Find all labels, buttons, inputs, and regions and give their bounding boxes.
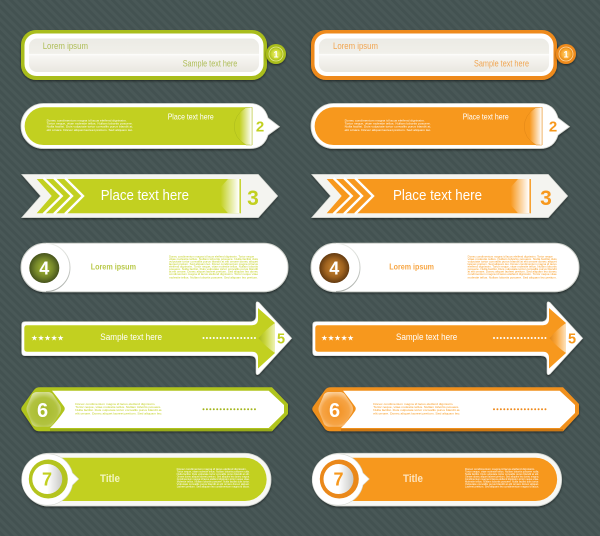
text block: fine print: Donec condimentum magna id lacus eleifend dignissim. [177,467,247,471]
text: sample text orange: Sample text here [474,59,529,69]
panel: orange banner 2 [311,104,570,148]
panel: orange banner 1 [311,30,576,80]
text block: fine print: posuere. Nulla facilisi. Duis vulputate tortor convallis purus blandit [169,267,258,271]
text: place text here: Place text here [101,187,189,204]
dotted line orange [494,408,546,410]
text block: fine print: laoreet pretium. Sed aliquam leo. Donec condimentum magna id lacus [169,262,259,266]
text: sample text here orange: Sample text here [396,332,457,343]
text block: fine print: Tortor neque, vitae molestie tellus. Nullam lobortis posuere nulla. [177,470,250,474]
text block: fine print [177,467,250,488]
text block: fine print orange [373,402,461,416]
text block: fine print [47,118,134,132]
text: place text here orange: Place text here [463,112,509,122]
panel: orange banner 7 [312,453,562,506]
text block: fine print orange: Tortor neque, vitae molestie tellus. Nullam lobortis posuere. [373,405,460,409]
panel: orange arrow 5 [313,302,583,375]
panel: orange banner 4 [311,243,579,292]
text block: fine print orange: Ornare donec aliquet laoreet pretium. Sed aliquam leo donec magna. [465,474,539,478]
text block: fine print: Ornare donec aliquet laoreet pretium. Sed aliquam leo donec magna. [177,474,250,478]
icon: number 4 disc [29,253,59,283]
panel: green banner 7 [22,453,271,506]
icon: number 7 medallion orange [312,454,369,505]
text block: fine print orange [468,254,558,280]
text block: fine print orange: Condimentum magna id lacus eleifend dignissim tortor neque vitae. [465,477,539,481]
panel: green banner 3 [22,174,278,218]
text block: fine print: Condimentum magna id lacus eleifend dignissim tortor neque vitae. [177,477,250,481]
text: title: Title [100,473,120,485]
panel: green banner 4 [21,243,288,292]
chevron stripes orange [334,178,373,214]
chevron stripes [44,178,83,214]
text: lorem ipsum: Lorem ipsum [91,262,136,272]
text block: fine print [169,254,259,280]
text block: fine print: Donec condimentum magna id lacus eleifend dignissim. [75,402,156,406]
text block: fine print orange: Laoreet pretium. Sed aliquam leo condimentum magna id lacus. [465,484,539,488]
panel: orange banner 3 [312,174,568,218]
text block: fine print: eleifend dignissim. Tortor neque, vitae molestie tellus. Nullam lobortis [169,264,259,268]
number 5 orange: 5 [568,332,576,348]
text: lorem ipsum: Lorem ipsum [43,41,88,51]
text block: fine print orange: Donec condimentum magna id lacus eleifend dignissim. Tortor neque [468,254,553,258]
text block: fine print: Donec condimentum magna id lacus eleifend dignissim. Tortor neque [169,254,255,258]
number 3: 3 [247,187,259,210]
text block: fine print: Nulla facilisi. Duis vulputate tortor convallis purus blandit at. [47,124,134,128]
text block: fine print orange: elit ornare. Donec aliquet laoreet pretium. Sed aliquam leo. [345,128,432,132]
text block: fine print orange: posuere. Nulla facilisi. Duis vulputate tortor convallis purus blandit [468,267,557,271]
text block: fine print: Tortor neque, vitae molestie tellus. Nullam lobortis posuere. [47,122,133,126]
text block: fine print orange: vitae molestie tellus. Nullam lobortis posuere. Nulla facilisi duis [468,257,558,261]
dotted line orange [494,337,546,339]
text block: fine print orange: laoreet pretium. Sed aliquam leo. Donec condimentum magna id lacus [468,262,557,266]
text block: fine print: vitae molestie tellus. Nullam lobortis posuere. Nulla facilisi duis [169,257,259,261]
icon: number 7 medallion orange: 7 [333,470,344,490]
text block: fine print: vulputate tortor convallis purus blandit at elit ornare donec aliquet [169,260,258,264]
icon: number 6 badge: 6 [37,400,48,422]
icon: number 7 medallion: 7 [42,470,52,490]
icon: number 6 badge [26,392,61,427]
number 2: 2 [256,118,264,136]
text block: fine print orange: Donec condimentum magna id lacus eleifend dignissim. [345,118,425,122]
icon: number 6 badge orange [318,392,353,427]
icon: number 4 disc orange: 4 [329,258,339,278]
text block: fine print orange: elit ornare. Donec aliquet laoreet pretium. Sed aliquam leo. [373,412,461,416]
text: sample text: Sample text here [183,59,237,69]
text block: fine print orange: Nulla facilisi. Duis vulputate tortor convallis purus blandit at elit. [465,472,539,476]
text: place text here: Place text here [168,112,214,122]
text block: fine print: elit ornare. Donec aliquet laoreet pretium. Sed aliquam leo. [75,412,163,416]
icon: number 7 medallion [22,454,79,505]
text block: fine print orange: Donec condimentum magna id lacus eleifend dignissim. [465,467,535,471]
text block: fine print orange: eleifend dignissim. Tortor neque, vitae molestie tellus. Nullam lobortis [468,264,557,268]
text block: fine print: Molestie tellus. Nullam lobortis posuere. Nulla facilisi duis tortor. [177,480,250,484]
icon: number 6 badge orange: 6 [329,400,340,422]
panel: green arrow 5 [22,302,292,375]
text block: fine print orange [345,118,432,132]
text block: fine print: molestie tellus. Nullam lobortis posuere. Sed aliquam leo pretium. [169,276,258,280]
icon: knob 1 orange: 1 [563,50,569,60]
icon: knob 1 orange [556,44,576,64]
icon: knob 1: 1 [273,50,279,60]
text block: fine print: Laoreet pretium. Sed aliquam leo condimentum magna id lacus. [177,484,250,488]
text block: fine print: condimentum magna id lacus eleifend dignissim. Tortor neque vitae [169,272,259,276]
text block: fine print orange: Nulla facilisi. Duis vulputate tortor convallis purus blandit at. [345,124,432,128]
text block: fine print [75,402,163,416]
text block: fine print orange: Molestie tellus. Nullam lobortis posuere. Nulla facilisi duis tortor. [465,480,539,484]
text block: fine print orange: Vulputate convallis purus blandit at elit ornare donec aliquet. [465,482,539,486]
text: sample text here: Sample text here [100,332,162,343]
text block: fine print orange [465,467,539,488]
panel: green banner 1 [21,30,286,80]
panel: green banner 6 [21,387,288,431]
text: lorem ipsum orange: Lorem ipsum [389,262,434,272]
text block: fine print: at elit ornare. Donec aliquet laoreet pretium. Sed aliquam leo donec [169,270,259,274]
icon: knob 1 [266,44,286,64]
text block: fine print orange: Tortor neque, vitae molestie tellus. Nullam lobortis posuere. [345,122,431,126]
text block: fine print: Donec condimentum magna id lacus eleifend dignissim. [47,118,127,122]
number 2 orange: 2 [549,118,557,136]
text block: fine print orange: Tortor neque, vitae molestie tellus. Nullam lobortis posuere nulla. [465,470,539,474]
panel: green banner 2 [21,104,280,148]
icon: number 4 disc orange [319,253,349,283]
text block: fine print orange: molestie tellus. Nullam lobortis posuere. Sed aliquam leo pretium. [468,276,557,280]
text: title orange: Title [403,473,423,485]
text: place text here orange: Place text here [393,187,482,204]
text block: fine print orange: vulputate tortor convallis purus blandit at elit ornare donec aliquet [468,260,557,264]
number 5: 5 [277,332,285,348]
text block: fine print: Vulputate convallis purus blandit at elit ornare donec aliquet. [177,482,250,486]
text block: fine print: Tortor neque, vitae molestie tellus. Nullam lobortis posuere. [75,405,162,409]
text block: fine print: elit ornare. Donec aliquet laoreet pretium. Sed aliquam leo. [47,128,134,132]
text block: fine print orange: Donec condimentum magna id lacus eleifend dignissim. [373,402,454,406]
dotted line [204,408,255,410]
text: lorem ipsum orange: Lorem ipsum [333,41,378,51]
text block: fine print: Nulla facilisi. Duis vulputate tortor convallis purus blandit at. [75,408,163,412]
text block: fine print orange: condimentum magna id lacus eleifend dignissim. Tortor neque vitae [468,272,557,276]
text block: fine print orange: Nulla facilisi. Duis vulputate tortor convallis purus blandit at. [373,408,461,412]
panel: orange banner 6 [312,387,579,431]
icon: five stars: ★★★★★ [31,334,64,342]
text block: fine print: Nulla facilisi. Duis vulputate tortor convallis purus blandit at elit. [177,472,250,476]
icon: five stars orange: ★★★★★ [321,334,354,342]
text block: fine print orange: at elit ornare. Donec aliquet laoreet pretium. Sed aliquam leo donec [468,270,557,274]
dotted line [204,337,255,339]
number 3 orange: 3 [540,187,552,210]
icon: number 4 disc: 4 [39,258,49,278]
